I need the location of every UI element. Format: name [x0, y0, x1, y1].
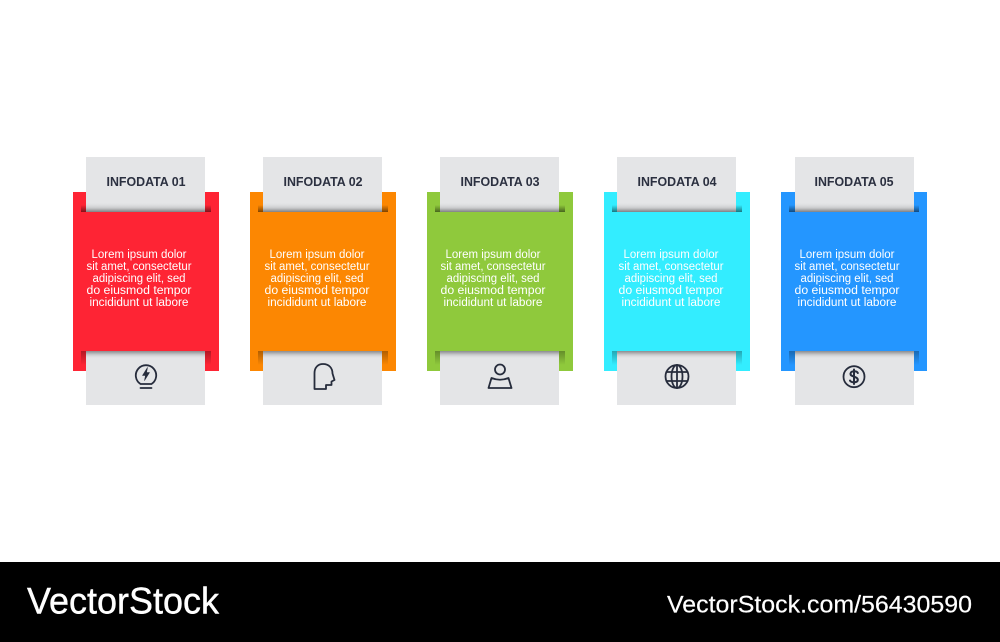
red card: [73, 192, 219, 371]
green card: [427, 192, 573, 371]
bottom tab: [617, 351, 736, 405]
text block: sit amet, consectetur: [618, 261, 724, 273]
bottom tab shadow notches: [435, 351, 565, 365]
text block: do eiusmod tempor: [86, 285, 192, 297]
text block: Lorem ipsum dolor: [800, 249, 895, 261]
bottom tab shadow notches: [612, 351, 742, 365]
icon: light bulb with bolt: [136, 365, 156, 388]
top tab: [795, 157, 914, 212]
text block: do eiusmod tempor: [440, 285, 546, 297]
text block: incididunt ut labore: [90, 297, 188, 309]
heading: INFODATA 02: [284, 175, 363, 189]
top tab shadow notches: [435, 205, 565, 212]
top tab shadow notches: [789, 205, 919, 212]
top tab: [86, 157, 205, 212]
text block: [264, 249, 370, 309]
top tab fold shadow: [617, 202, 736, 212]
text block: adipiscing elit, sed: [270, 273, 364, 285]
text block: [794, 249, 900, 309]
text block: Lorem ipsum dolor: [92, 249, 187, 261]
text block: do eiusmod tempor: [794, 285, 900, 297]
text block: adipiscing elit, sed: [624, 273, 718, 285]
text block: incididunt ut labore: [798, 297, 896, 309]
top tab fold shadow: [263, 202, 382, 212]
panel: infodata 04: [604, 157, 750, 405]
cyan card: [604, 192, 750, 371]
text block: incididunt ut labore: [268, 297, 366, 309]
text block: adipiscing elit, sed: [800, 273, 894, 285]
text block: do eiusmod tempor: [618, 285, 724, 297]
text block: Lorem ipsum dolor: [624, 249, 719, 261]
blue card: [781, 192, 927, 371]
heading: INFODATA 04: [638, 175, 717, 189]
bottom tab shadow notches: [789, 351, 919, 365]
text block: sit amet, consectetur: [86, 261, 192, 273]
icon: dollar coin: [844, 366, 864, 387]
bottom tab shadow notches: [81, 351, 211, 365]
icon: globe: [666, 365, 688, 388]
top tab fold shadow: [440, 202, 559, 212]
icon: person on pedestal: [488, 364, 512, 388]
text block: adipiscing elit, sed: [92, 273, 186, 285]
bottom tab: [440, 351, 559, 405]
bottom tab fold shadow: [617, 351, 736, 359]
image url: VectorStock.com/56430590: [667, 592, 972, 618]
text block: incididunt ut labore: [622, 297, 720, 309]
bottom tab fold shadow: [86, 351, 205, 359]
bottom tab fold shadow: [795, 351, 914, 359]
bottom tab fold shadow: [440, 351, 559, 359]
top tab: [617, 157, 736, 212]
logo wordmark: VectorStock: [27, 580, 219, 622]
top tab shadow notches: [81, 205, 211, 212]
text block: [440, 249, 546, 309]
top tab: [440, 157, 559, 212]
text block: incididunt ut labore: [444, 297, 542, 309]
top tab: [263, 157, 382, 212]
bottom tab fold shadow: [263, 351, 382, 359]
text block: do eiusmod tempor: [264, 285, 370, 297]
heading: INFODATA 03: [460, 175, 540, 189]
text block: sit amet, consectetur: [794, 261, 900, 273]
text block: adipiscing elit, sed: [446, 273, 540, 285]
top tab shadow notches: [612, 205, 742, 212]
panel: infodata 02: [250, 157, 396, 405]
bottom tab shadow notches: [258, 351, 388, 365]
icon: head profile: [314, 364, 334, 389]
panel: infodata 01: [73, 157, 219, 405]
bottom tab: [263, 351, 382, 405]
orange card: [250, 192, 396, 371]
heading: INFODATA 05: [814, 175, 894, 189]
panel: infodata 05: [781, 157, 927, 405]
panel: infodata 03: [427, 157, 573, 405]
top tab shadow notches: [258, 205, 388, 212]
text block: Lorem ipsum dolor: [446, 249, 541, 261]
footer bar: [0, 562, 1000, 642]
text block: sit amet, consectetur: [440, 261, 546, 273]
text block: [86, 249, 192, 309]
bottom tab: [795, 351, 914, 405]
text block: sit amet, consectetur: [264, 261, 370, 273]
text block: Lorem ipsum dolor: [270, 249, 365, 261]
top tab fold shadow: [795, 202, 914, 212]
heading: INFODATA 01: [106, 175, 186, 189]
text block: [618, 249, 724, 309]
top tab fold shadow: [86, 202, 205, 212]
bottom tab: [86, 351, 205, 405]
